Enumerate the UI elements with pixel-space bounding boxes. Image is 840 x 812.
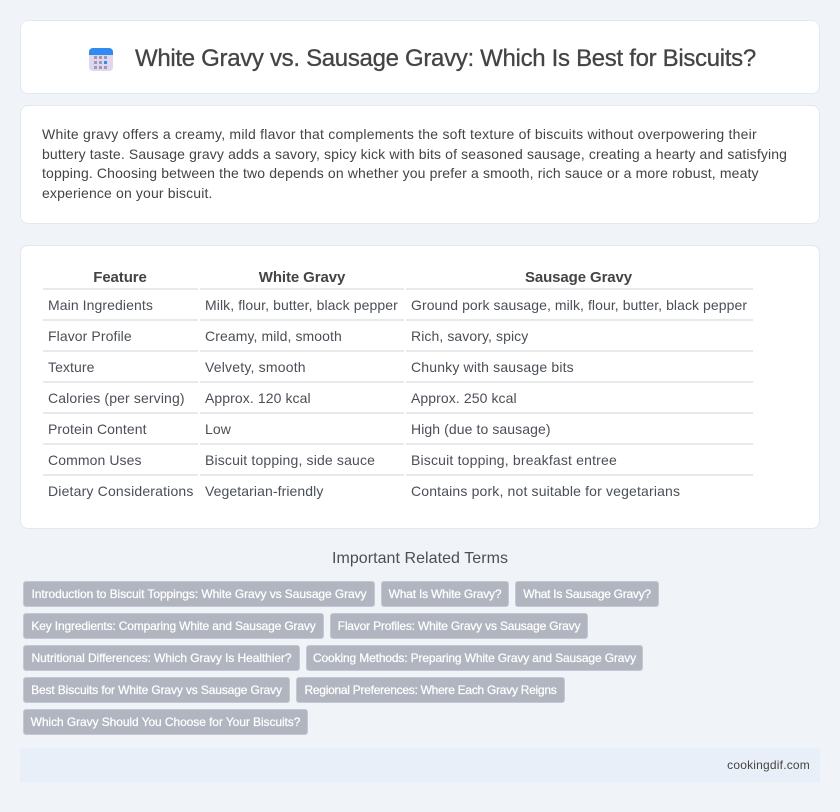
row: calories: Calories (per serving) [48, 390, 185, 406]
tag [23, 677, 290, 703]
row: protein content: Low [205, 421, 231, 437]
row: main ingredients: Ground pork sausage, milk, flour, butter, black pepper [411, 297, 747, 313]
intro paragraph: buttery taste. Sausage gravy adds a savory, spicy kick with bits of seasoned sausage, creating a hearty and satisfying [42, 146, 787, 162]
intro paragraph: experience on your biscuit. [42, 185, 213, 201]
tag [23, 581, 375, 607]
intro paragraph: topping. Choosing between the two depends on whether you prefer a smooth, rich sauce or a more robust, meaty [42, 165, 759, 181]
table header: Feature [93, 269, 147, 286]
row: texture: Texture [48, 359, 95, 375]
intro paragraph [42, 126, 787, 201]
table header [43, 269, 753, 290]
related terms tags [23, 581, 659, 735]
row: common uses: Common Uses [48, 452, 142, 468]
row: common uses [43, 452, 753, 476]
row: main ingredients: Milk, flour, butter, black pepper [205, 297, 398, 313]
tag [330, 613, 588, 639]
row: texture: Chunky with sausage bits [411, 359, 574, 375]
row: flavor profile: Creamy, mild, smooth [205, 328, 342, 344]
row: dietary considerations: Contains pork, not suitable for vegetarians [411, 483, 680, 499]
row: calories [43, 390, 753, 414]
tag: Introduction to Biscuit Toppings: White Gravy vs Sausage Gravy [32, 587, 366, 601]
row: texture: Velvety, smooth [205, 359, 306, 375]
tag: What Is Sausage Gravy? [523, 587, 651, 601]
tag: Flavor Profiles: White Gravy vs Sausage Gravy [338, 619, 580, 633]
row: flavor profile: Flavor Profile [48, 328, 132, 344]
table header: Sausage Gravy [525, 269, 632, 286]
row: dietary considerations [48, 483, 680, 499]
row: main ingredients [43, 297, 753, 321]
tag: Key Ingredients: Comparing White and Sausage Gravy [31, 619, 316, 633]
intro text panel [20, 105, 820, 224]
footer bar [20, 748, 820, 782]
related terms heading: Important Related Terms [332, 550, 508, 567]
table header: White Gravy [259, 269, 345, 286]
row: calories: Approx. 120 kcal [205, 390, 311, 406]
row: common uses: Biscuit topping, breakfast entree [411, 452, 617, 468]
icon: calendar [89, 48, 113, 71]
row: flavor profile [43, 328, 753, 352]
row: main ingredients: Main Ingredients [48, 297, 153, 313]
tag: Which Gravy Should You Choose for Your Biscuits? [31, 715, 300, 729]
tag [306, 645, 643, 671]
tag [23, 613, 324, 639]
tag: Cooking Methods: Preparing White Gravy and Sausage Gravy [313, 651, 636, 665]
row: protein content: High (due to sausage) [411, 421, 551, 437]
row: texture [43, 359, 753, 383]
tag [296, 677, 565, 703]
row: calories: Approx. 250 kcal [411, 390, 517, 406]
row: common uses: Biscuit topping, side sauce [205, 452, 375, 468]
intro paragraph: White gravy offers a creamy, mild flavor that complements the soft texture of biscuits without overpowering their [42, 126, 757, 142]
tag: Regional Preferences: Where Each Gravy Reigns [304, 683, 556, 697]
footer source: cookingdif.com [727, 758, 810, 772]
header card [20, 20, 820, 94]
row: protein content: Protein Content [48, 421, 147, 437]
title: White Gravy vs. Sausage Gravy: Which Is Best for Biscuits? [135, 45, 756, 72]
comparison table panel [20, 245, 820, 529]
row: dietary considerations: Vegetarian-friendly [205, 483, 323, 499]
tag [381, 581, 509, 607]
tag [23, 709, 308, 735]
row: dietary considerations: Dietary Considerations [48, 483, 194, 499]
tag: Best Biscuits for White Gravy vs Sausage Gravy [31, 683, 282, 697]
row: protein content [43, 421, 753, 445]
tag [515, 581, 659, 607]
row: flavor profile: Rich, savory, spicy [411, 328, 528, 344]
tag [23, 645, 300, 671]
tag: What Is White Gravy? [389, 587, 501, 601]
tag: Nutritional Differences: Which Gravy Is Healthier? [32, 651, 291, 665]
